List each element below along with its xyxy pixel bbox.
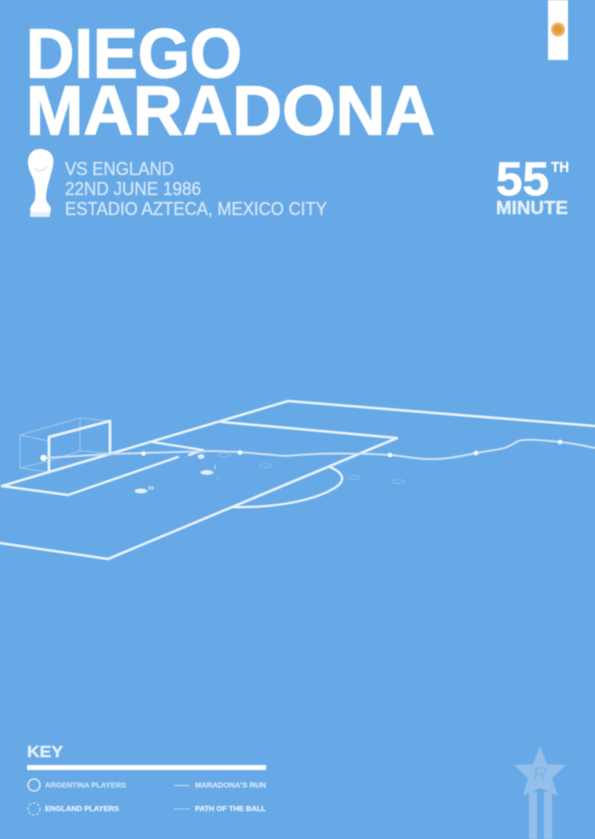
penalty arc xyxy=(233,467,342,507)
minute label: 55 xyxy=(496,152,549,205)
title: MARADONA xyxy=(26,72,435,150)
minute label: MINUTE xyxy=(496,198,568,218)
match details: VS ENGLAND xyxy=(65,159,174,179)
key: Maradona's run: MARADONA'S RUN xyxy=(195,780,266,790)
pitch diagram xyxy=(0,401,595,559)
player markers xyxy=(135,453,404,493)
key xyxy=(27,744,267,815)
goal net xyxy=(20,418,110,472)
match details xyxy=(65,159,327,219)
ball and run markers xyxy=(40,440,562,461)
minute label xyxy=(496,152,569,218)
key: Argentina players xyxy=(28,779,126,791)
goal frame xyxy=(49,421,110,472)
key: England players: ENGLAND PLAYERS xyxy=(45,804,119,813)
title: DIEGO xyxy=(26,14,242,92)
icon: Argentina flag xyxy=(548,0,568,60)
logo: star with stripes: R xyxy=(533,764,547,786)
key: path of the ball: PATH OF THE BALL xyxy=(195,804,267,813)
key heading: KEY xyxy=(27,744,63,761)
logo: star with stripes xyxy=(514,746,566,839)
key rule xyxy=(27,765,266,770)
title xyxy=(26,14,435,150)
key: England players xyxy=(28,803,119,815)
pitch boundary lines xyxy=(2,401,595,486)
Maradona's run xyxy=(43,440,595,459)
match details: ESTADIO AZTECA, MEXICO CITY xyxy=(65,199,327,219)
icon: World Cup trophy xyxy=(28,149,53,217)
six-yard box xyxy=(2,442,203,495)
minute label: TH xyxy=(551,160,569,176)
key: Argentina players: ARGENTINA PLAYERS xyxy=(45,780,126,790)
match details: 22ND JUNE 1986 xyxy=(65,179,201,199)
